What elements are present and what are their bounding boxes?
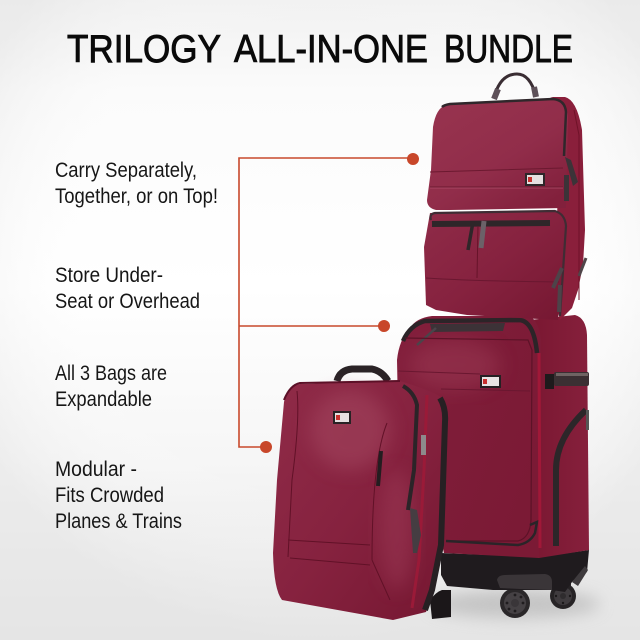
pocket zipper [432, 223, 550, 224]
side handle [545, 372, 589, 389]
callout connector lines [239, 158, 413, 447]
backpack body [273, 381, 446, 620]
text block: modular: Modular - [55, 458, 137, 481]
title: ALL-IN-ONE [234, 28, 428, 71]
backpack strap [430, 590, 451, 619]
text block: carry: Together, or on Top! [55, 185, 218, 208]
suitcase tag [480, 375, 501, 388]
backpack tag [333, 411, 351, 424]
suitcase base [441, 550, 589, 592]
callout dot: suitcase [378, 320, 390, 332]
callout dot: top bag [407, 153, 419, 165]
rolling suitcase [397, 315, 589, 618]
top bag upper compartment [427, 98, 568, 210]
base wheel pod [497, 574, 552, 590]
front highlight [410, 340, 500, 390]
suitcase wheels [500, 578, 576, 618]
text block: expandable: Expandable [55, 388, 152, 411]
backpack outer edge [425, 398, 445, 610]
backpack inner zipper [403, 386, 417, 510]
text block: store: Store Under- [55, 264, 163, 287]
text block: expandable: All 3 Bags are [55, 362, 167, 385]
suitcase side [530, 315, 589, 558]
backpack highlight [310, 390, 390, 470]
top bag tag [525, 173, 545, 186]
text block: modular: Planes & Trains [55, 510, 182, 533]
top bag [424, 74, 586, 320]
side pocket trim [556, 410, 586, 546]
suitcase front [397, 316, 541, 558]
text block: modular [55, 458, 182, 533]
title: TRILOGY [67, 28, 221, 71]
top bag side panel [550, 97, 585, 320]
text block: carry: Carry Separately, [55, 159, 197, 182]
text block: store: Seat or Overhead [55, 290, 200, 313]
callout dot: backpack [260, 441, 272, 453]
top bag zippers [564, 157, 578, 201]
small backpack [273, 369, 451, 620]
top bag lower compartment [424, 211, 566, 320]
title: BUNDLE [444, 28, 573, 71]
text block: modular: Fits Crowded [55, 484, 164, 507]
top bag handle [494, 74, 536, 98]
text block: store [55, 264, 200, 313]
pocket seam [398, 371, 530, 391]
floor shadow [430, 590, 600, 618]
text block: expandable [55, 362, 167, 411]
backpack handle [337, 369, 388, 381]
backpack seams [288, 391, 390, 600]
backpack front zipper [378, 451, 381, 486]
text block: carry [55, 159, 218, 208]
title [67, 28, 573, 71]
top zipper [403, 320, 537, 353]
